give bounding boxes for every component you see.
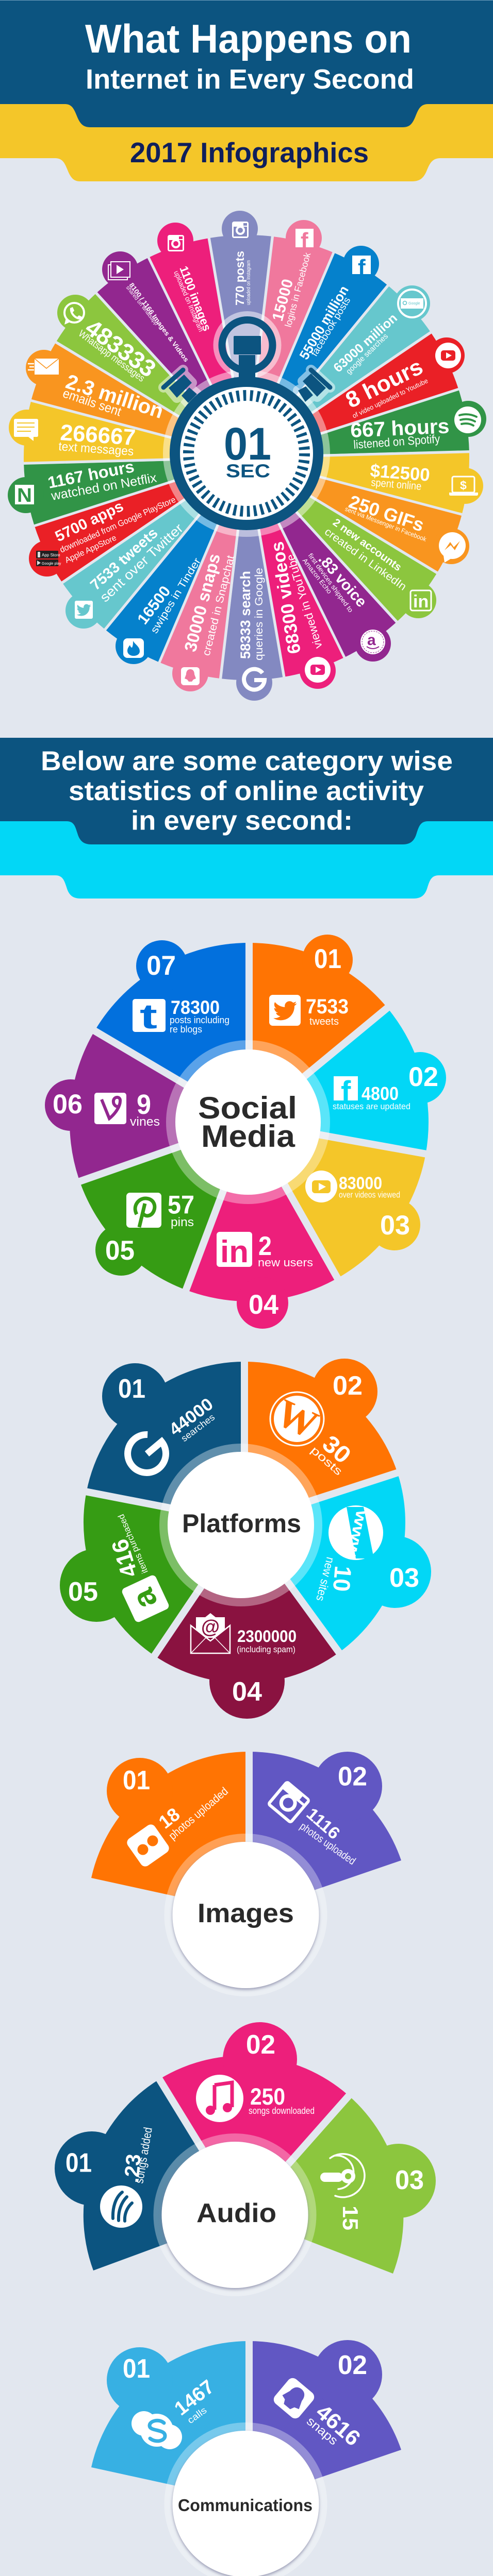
stat: 1100 images: 1100 images	[177, 264, 213, 333]
wedge: 68300 videos	[216, 448, 346, 689]
stat: 15000: 15000	[269, 277, 297, 323]
header banner	[0, 0, 493, 181]
icon: facebook: f	[341, 1075, 351, 1109]
wedge: 8100 images and videos	[94, 251, 273, 476]
icon: youtube	[305, 657, 331, 683]
stat: 10 new sites: new sites	[314, 1556, 337, 1602]
icon: tumblr: t	[140, 997, 157, 1036]
stat: 58333 search: queries in Google	[253, 568, 265, 660]
stat: 2300000	[237, 1627, 297, 1654]
stat: 667 hours: listened on Spotify	[353, 432, 440, 451]
wedge: 250 GIFs	[234, 428, 469, 574]
stat: 10 new sites	[314, 1556, 357, 1602]
icon: instagram	[232, 222, 249, 238]
wedge: 7533 tweets	[59, 434, 268, 632]
stat: 250 GIFs: sent via Messenger in Facebook	[344, 505, 428, 543]
stat: 1167 hours	[46, 457, 158, 503]
wedge: 667 hours	[241, 388, 486, 489]
wedge: 5700 apps	[29, 429, 260, 584]
segment 01 skype: 01	[123, 2354, 150, 2384]
segment 05 amazon: 05	[68, 1577, 98, 1607]
icon: facebook	[334, 1075, 358, 1109]
stat: 83000: over videos viewed	[339, 1190, 400, 1199]
stat: 7533 tweets	[306, 995, 349, 1027]
icon: spotify	[100, 2185, 142, 2228]
stat: 44000 searches: 44000	[166, 1394, 217, 1439]
stat: 8100 images and videos: shared on whatsapp	[125, 284, 159, 327]
heading: platforms: Platforms	[182, 1509, 301, 1538]
icon: tinder	[123, 638, 144, 658]
segment 03 youtube: 03	[380, 1210, 410, 1241]
segment 01 google: 01	[118, 1374, 145, 1404]
wedge: 483333	[53, 291, 267, 482]
segment 02 facebook: 02	[408, 1062, 438, 1092]
stat: 483333: Whatsapp messages	[76, 328, 146, 384]
icon: linkedin: in	[413, 592, 429, 612]
heading: communications: Communications	[178, 2496, 313, 2515]
stat: 55000 million: facebook posts	[309, 295, 353, 359]
dial text: 01	[224, 418, 271, 469]
icon: amazon	[121, 1574, 170, 1623]
icon: email	[191, 1613, 230, 1653]
wedge: 770 posts	[209, 211, 278, 459]
icon: www globe	[328, 1505, 383, 1560]
icon: www globe: www	[343, 1508, 371, 1560]
stat: 7533 tweets: sent over Twitter	[97, 520, 186, 605]
stat: 9 vines: vines	[130, 1115, 160, 1129]
stat: 667 hours: 667 hours	[350, 415, 450, 442]
icon: facebook: f	[301, 228, 308, 253]
icon: music	[196, 2075, 243, 2122]
stat: 250 songs: songs downloaded	[249, 2106, 315, 2116]
segment 02 songs downloaded: 02	[246, 2030, 275, 2060]
icon: app store badges	[36, 551, 61, 566]
section heading: in every second:	[131, 806, 353, 836]
segment 04 linkedin	[186, 1122, 337, 1329]
wedge: 30000 snaps	[158, 449, 277, 691]
stat: 2 new users: new users	[258, 1256, 313, 1269]
stat: 1116 photos: photos uploaded	[298, 1820, 358, 1867]
title: What Happens on	[85, 16, 412, 61]
icon: twitter	[75, 601, 93, 619]
icon: whatsapp	[64, 303, 84, 325]
stat: 68300 videos: viewed in YouTube	[284, 553, 325, 650]
icon: google search: Google	[408, 302, 420, 306]
stat: 83000	[339, 1174, 400, 1199]
stat: 2.3 million: 2.3 million	[63, 370, 166, 423]
subtitle: 2017 Infographics	[130, 137, 369, 168]
stat: .83 voice: .83 voice	[315, 551, 370, 611]
icon: vine	[94, 1093, 126, 1124]
panel: images	[91, 1752, 401, 1996]
heading: social media: Media	[201, 1119, 295, 1154]
title: Internet in Every Second	[86, 64, 414, 95]
icon: youtube	[305, 1171, 337, 1202]
segment 05 pinterest	[80, 1122, 249, 1290]
segment 05 pinterest: 05	[105, 1235, 135, 1266]
segment 05 amazon	[60, 1492, 244, 1656]
icon: amazon: a	[367, 632, 376, 649]
panel: communications	[91, 2340, 401, 2576]
icon: flickr	[125, 1822, 171, 1869]
segment 04 emails: 04	[232, 1677, 262, 1707]
segment 06 vine	[45, 1031, 249, 1181]
stat: 7533 tweets: 7533 tweets	[87, 525, 161, 594]
icon: youtube	[435, 343, 461, 368]
stat: 9 vines: 9	[137, 1089, 151, 1120]
stat: 7533 tweets: tweets	[309, 1016, 339, 1027]
stat: 78300 posts: 78300	[171, 997, 220, 1018]
wedge: 2 new accounts	[226, 433, 440, 624]
stat: .23 songs added: .23	[120, 2153, 145, 2184]
segment 07 tumblr	[95, 940, 249, 1122]
heading: audio: Audio	[196, 2198, 276, 2228]
stat: 416 items: 416	[106, 1536, 143, 1581]
segment 03 new sites: 03	[389, 1563, 419, 1593]
stat: .83 voice: first devices shipped to	[307, 552, 355, 614]
icon: facebook	[295, 228, 314, 253]
stat: $12500: $12500	[369, 461, 431, 485]
stat: 63000 million: google searches	[344, 332, 390, 376]
icon: snapchat	[271, 2376, 317, 2421]
icon: text message	[14, 419, 38, 441]
stat: 770 posts: 770 posts	[233, 251, 247, 306]
stat: 30 posts	[308, 1430, 356, 1478]
panel: audio	[55, 2022, 436, 2296]
stat: 4616 snaps: 4616	[311, 2399, 365, 2450]
stat: 770 posts: uploaded on Instagram	[246, 260, 252, 305]
dial text: SEC	[226, 461, 270, 481]
stat: 58333 search: 58333 search	[238, 571, 253, 659]
stat: 4616 snaps: snaps	[304, 2414, 340, 2448]
segment 01 skype	[91, 2341, 249, 2502]
segment 04 emails	[155, 1522, 339, 1719]
stat: 2 new accounts: 2 new accounts	[331, 516, 404, 573]
segment 01 spotify	[55, 2079, 243, 2270]
icon: skype	[132, 2411, 182, 2449]
icon: instagram	[168, 235, 184, 251]
stat: 57 pins: 57	[168, 1190, 194, 1219]
segment 01 spotify: 01	[65, 2148, 92, 2178]
stat: 5700 apps: downloaded from Google PlayStore	[58, 495, 177, 555]
stat: 78300 posts: posts including	[170, 1015, 229, 1025]
stat: 1467 calls: 1467	[171, 2376, 219, 2420]
stat: 2 new accounts: created in LinkedIn	[322, 526, 408, 593]
wedge: 2.3 million	[26, 341, 259, 487]
segment 06 vine: 06	[53, 1089, 83, 1120]
wedge: 58333 search	[215, 456, 284, 701]
stopwatch dial	[163, 311, 330, 537]
stat: 2.3 million: emails sent	[61, 386, 123, 419]
stat: 30000 snaps: created in Snapchat	[201, 554, 237, 657]
segment 02 wordpress: 02	[333, 1371, 363, 1401]
stat: $12500: spent online	[371, 477, 422, 493]
stat: 30 posts: posts	[308, 1444, 345, 1478]
icon: pinterest	[126, 1193, 161, 1228]
title	[85, 16, 414, 95]
segment 01 google	[87, 1362, 244, 1522]
stat: 16500 swipes	[134, 556, 203, 636]
section banner	[0, 738, 493, 899]
stat: 68300 videos: 68300 videos	[267, 540, 305, 655]
stat: 8 hours: of video uploaded to Youtube	[351, 377, 429, 420]
stat: 15: 15	[338, 2206, 363, 2230]
stat: 1100 images: uploaded on Instagram	[172, 269, 206, 333]
segment 01 twitter	[249, 935, 387, 1122]
wedge: 63000 million	[225, 283, 434, 481]
stat: 10 new sites: 10	[328, 1565, 357, 1592]
icon: wordpress: W	[270, 1391, 324, 1447]
segment 03 podcast: 03	[395, 2165, 424, 2195]
icon: facebook: f	[358, 255, 366, 280]
heading: images: Images	[198, 1899, 294, 1928]
segment 02 instagram	[249, 1752, 401, 1912]
stat: .23 songs added: songs added	[132, 2126, 155, 2184]
stat: 250 songs: 250	[250, 2083, 285, 2110]
icon: spotify	[454, 406, 481, 433]
wedge: .83 voice	[220, 439, 399, 662]
stat: 5700 apps: 5700 apps	[53, 498, 126, 545]
stat: 5700 apps: Apple AppStore	[64, 534, 118, 565]
icon: video	[108, 262, 130, 280]
stat: 44000 searches: searches	[179, 1412, 217, 1444]
stat: 4800 statuses: 4800	[361, 1083, 399, 1104]
icon: laptop: $	[460, 479, 467, 492]
segment 07 tumblr: 07	[146, 951, 176, 981]
icon: email	[28, 359, 59, 375]
icon: app store badges: Google play	[42, 562, 61, 566]
panel: platforms	[60, 1359, 431, 1719]
section heading: statistics of online activity	[69, 776, 424, 806]
icon: google search	[398, 290, 426, 317]
icon: app store badges: App Store	[42, 553, 60, 557]
icon: tumblr	[133, 997, 166, 1036]
stat: 8 hours: 8 hours	[342, 354, 427, 413]
segment 04 linkedin: 04	[249, 1290, 279, 1320]
icon: amazon	[360, 630, 385, 654]
icon: laptop	[449, 477, 478, 496]
segment 01 flickr: 01	[123, 1766, 150, 1795]
segment 02 songs downloaded	[159, 2022, 349, 2215]
wedge: 16500 swipes	[103, 441, 274, 666]
wedge: 1167 hours	[8, 426, 252, 527]
icon: podcast	[320, 2154, 365, 2197]
stat: 1116 photos	[298, 1804, 358, 1867]
stat: 483333: 483333	[80, 314, 161, 382]
wedge: 8 hours	[233, 331, 465, 486]
segment 01 twitter: 01	[314, 944, 341, 974]
segment 03 youtube	[249, 1122, 426, 1278]
stat: 78300 posts: re blogs	[170, 1024, 202, 1035]
stat: 7533 tweets: 7533	[306, 995, 349, 1018]
stat: 4800 statuses: statuses are updated	[333, 1101, 410, 1111]
stat: 2 new users	[258, 1231, 313, 1269]
icon: netflix: N	[17, 485, 32, 506]
stat: 416 items: items purchased	[116, 1513, 150, 1575]
stat: 266667: 266667	[59, 420, 136, 450]
stat: 55000 million: 55000 million	[296, 283, 352, 362]
stat: 68300 videos	[267, 540, 325, 655]
segment 03 podcast	[243, 2096, 436, 2274]
segment 02 snapchat	[249, 2340, 401, 2502]
stat: 1116 photos: 1116	[303, 1804, 344, 1843]
segment 01 flickr	[91, 1752, 249, 1912]
icon: snapchat	[181, 667, 200, 685]
segment 03 new sites	[244, 1473, 431, 1652]
icon: email: @	[201, 1616, 220, 1637]
stat: 83000: 83000	[339, 1174, 382, 1193]
icon: google	[120, 1427, 174, 1481]
icon: linkedin: in	[220, 1234, 249, 1269]
stat: 57 pins: pins	[171, 1215, 194, 1229]
stat: 15000	[269, 251, 313, 328]
stat: 2 new users: 2	[258, 1231, 272, 1261]
stat: 1467 calls: calls	[186, 2405, 209, 2426]
stat: 16500 swipes: swipes in Tinder	[149, 556, 203, 636]
stat: 30000 snaps: 30000 snaps	[180, 552, 224, 654]
panel: stopwatch wheel	[8, 211, 486, 701]
stat: 18 photos: 18	[155, 1803, 184, 1833]
segment 02 snapchat: 02	[338, 2350, 367, 2380]
icon: facebook	[352, 255, 371, 280]
heading: social media: Social	[198, 1091, 297, 1125]
wedge: 1100 images	[147, 223, 277, 467]
stat: 266667: text messages	[58, 439, 134, 459]
wedge: $12500	[243, 426, 483, 515]
stat: 18 photos: photos uploaded	[166, 1785, 231, 1842]
stat: 30 posts: 30	[317, 1430, 356, 1469]
stat: 63000 million: 63000 million	[331, 311, 400, 375]
icon: google	[244, 669, 265, 690]
icon: twitter	[269, 995, 301, 1026]
stat: .83 voice: Amazon Echo	[301, 557, 334, 595]
panel: social media	[45, 935, 446, 1329]
stat: 250 songs	[249, 2083, 315, 2116]
stat: 2300000: (including spam)	[237, 1645, 295, 1654]
icon: messenger	[439, 532, 466, 563]
stat: 2300000: 2300000	[237, 1627, 297, 1646]
stat: 8100 images and videos: 8100 / 1166 Images & Videos	[128, 281, 190, 363]
segment 02 wordpress	[244, 1359, 398, 1522]
heading: social media	[198, 1091, 297, 1154]
section heading: Below are some category wise	[41, 746, 453, 776]
stat: 1167 hours: watched on Netflix	[50, 470, 158, 503]
wedge: 266667	[9, 400, 250, 489]
stat: 250 GIFs: 250 GIFs	[346, 491, 427, 536]
wedge: 15000 logins	[216, 220, 335, 466]
segment 02 instagram: 02	[338, 1762, 367, 1792]
icon: instagram	[266, 1780, 311, 1825]
stat: 9 vines	[130, 1089, 160, 1129]
stat: 4800 statuses	[333, 1083, 410, 1111]
stat: 78300 posts	[170, 997, 229, 1035]
section heading	[41, 746, 453, 836]
stat: 1167 hours: 1167 hours	[46, 457, 136, 492]
stat: 58333 search	[238, 568, 265, 660]
segment 02 facebook	[249, 1008, 446, 1154]
stat: 15000: logins in Facebook	[283, 251, 313, 328]
stat: .23 songs added	[120, 2126, 155, 2184]
stat: 16500 swipes: 16500	[134, 583, 174, 628]
wedge: 55000 million	[219, 246, 390, 474]
icon: amazon: a	[125, 1583, 165, 1615]
